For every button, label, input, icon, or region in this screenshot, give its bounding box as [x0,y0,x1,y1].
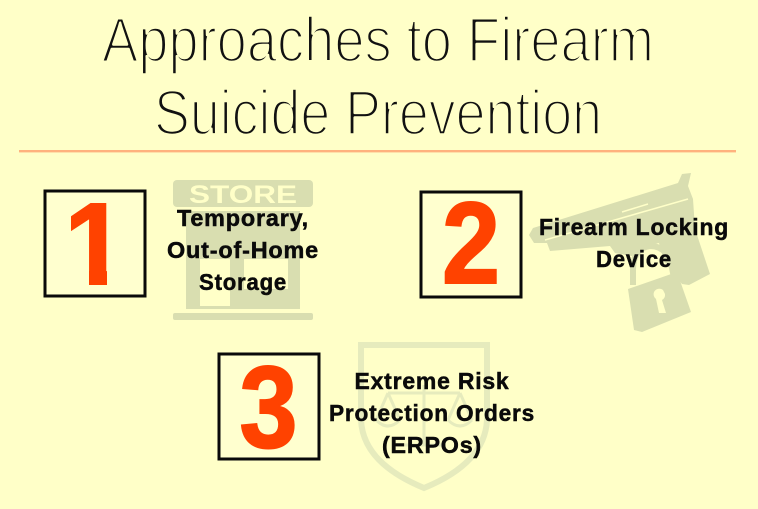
title divider [19,150,736,152]
title [102,6,654,148]
label: extreme risk protection orders: Extreme Risk [354,368,510,394]
title: Suicide Prevention [154,78,602,148]
label: temporary out-of-home storage: Storage [199,269,287,295]
label: temporary out-of-home storage [167,205,319,295]
icon: store [173,180,313,320]
label: temporary out-of-home storage: Temporary, [177,205,309,231]
number box 2 [421,178,521,308]
number box 2: 2 [442,178,500,308]
label: extreme risk protection orders: (ERPOs) [382,432,482,458]
number box 3: 3 [240,342,298,472]
label: firearm locking device [539,214,729,272]
label: extreme risk protection orders [329,368,535,458]
icon: handgun with padlock [529,173,710,332]
number box 1 [44,190,146,298]
label: extreme risk protection orders: Protection Orders [329,400,535,426]
panel: extreme risk protection orders [219,342,535,488]
number box 1: 1 [64,179,126,309]
label: firearm locking device: Device [596,246,672,272]
title: Approaches to Firearm [102,6,654,76]
panel: firearm locking device [421,173,729,332]
icon: store: STORE [189,181,297,209]
icon: shield with scales [361,345,487,488]
label: firearm locking device: Firearm Locking [539,214,729,240]
label: temporary out-of-home storage: Out-of-Home [167,237,319,263]
panel: temporary storage [45,179,319,320]
number box 3 [219,342,319,472]
